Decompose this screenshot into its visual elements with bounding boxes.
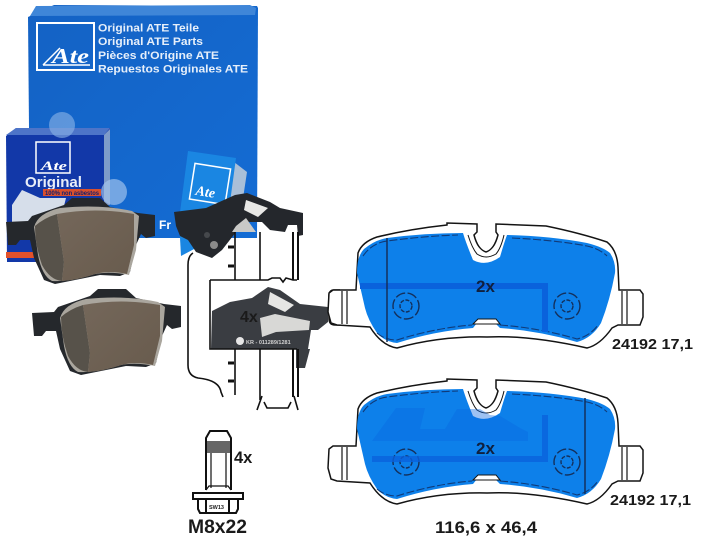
bolt quantity label: 4x	[234, 449, 253, 467]
ATE logo on large box: Ate	[49, 44, 89, 68]
printed pad illustration	[12, 190, 66, 222]
brake clip line drawing	[188, 232, 340, 410]
multilingual box heading: Repuestos Originales ATE	[98, 64, 248, 76]
dimensions label: 116,6 x 46,4	[435, 519, 538, 537]
quantity label upper pad: 2x	[476, 277, 495, 296]
brake pad diagram: lower	[328, 379, 643, 504]
watermark badges	[49, 112, 127, 205]
wrench size label: SW13	[209, 505, 224, 511]
quantity label lower pad: 2x	[476, 439, 495, 458]
quantity label 4x for clips: 4x	[240, 309, 258, 326]
brake pad photo: lower	[32, 289, 181, 375]
multilingual box heading: Original ATE Teile	[98, 22, 199, 34]
multilingual box heading: Original ATE Parts	[98, 36, 203, 48]
multilingual box heading	[98, 22, 248, 76]
leaflet illustration on box: Ate	[194, 184, 216, 202]
asbestos strip: 100% non asbestos	[45, 190, 100, 197]
brake pad diagram: upper	[328, 223, 643, 348]
bolt size label: M8x22	[188, 516, 247, 538]
leaflet illustration on box	[179, 151, 247, 256]
bolt diagram	[193, 431, 243, 513]
product box: large ATE box	[28, 5, 258, 256]
product box: small Original box	[6, 128, 110, 262]
brake clip photo: lower	[210, 287, 328, 369]
part number label upper: 24192 17,1	[612, 337, 693, 353]
ATE logo on large box	[37, 23, 94, 70]
multilingual box heading: Pièces d'Origine ATE	[98, 50, 219, 62]
ATE logo on small box: Ate	[40, 158, 67, 173]
brake pad photo: upper	[6, 198, 155, 284]
brake clip photo: lower: KR - 011289/1281	[246, 340, 291, 346]
part number label lower: 24192 17,1	[610, 493, 691, 509]
Original label: Original	[25, 174, 82, 191]
brake clip photo: upper	[174, 193, 303, 258]
box text fragment: Fr	[159, 218, 171, 232]
